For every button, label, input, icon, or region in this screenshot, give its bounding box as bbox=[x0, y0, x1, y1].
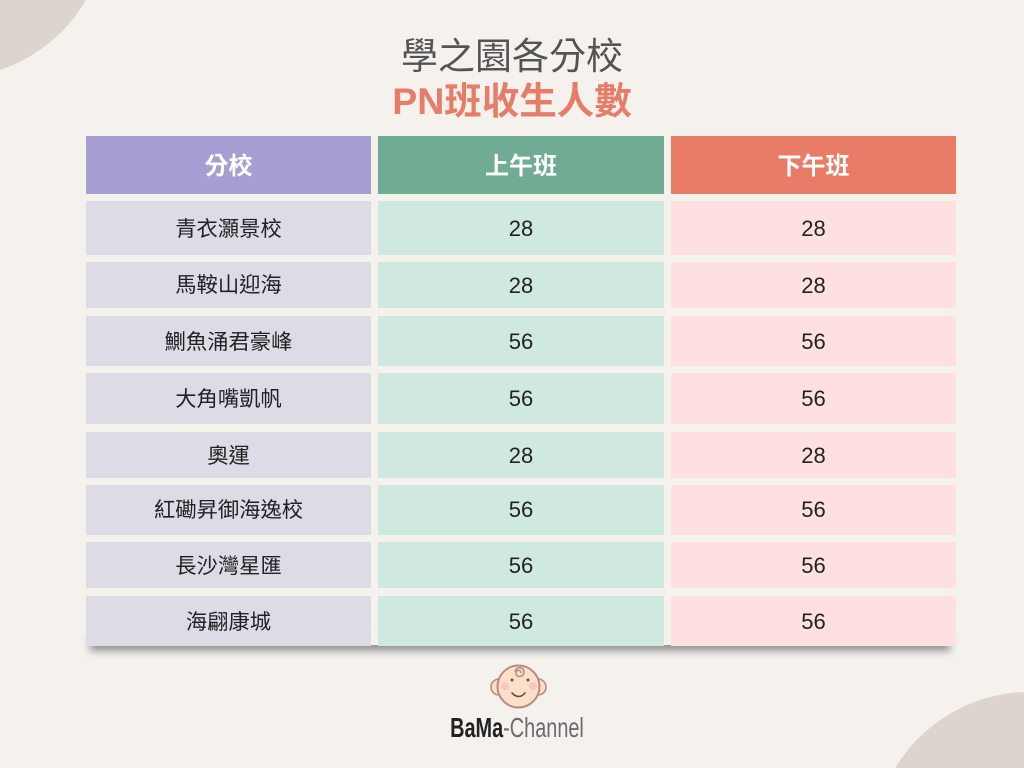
header: branch bbox=[86, 136, 371, 194]
row 3 morning bbox=[378, 316, 664, 366]
header: morning class: 上午班 bbox=[485, 153, 557, 180]
row 7 morning: 56 bbox=[509, 552, 533, 578]
header: afternoon class: 下午班 bbox=[778, 153, 850, 180]
row 5 morning bbox=[378, 432, 664, 478]
row 5 afternoon bbox=[671, 432, 956, 478]
row 3 morning: 56 bbox=[509, 328, 533, 354]
row 2 morning bbox=[378, 262, 664, 308]
row 1 morning: 28 bbox=[509, 216, 533, 240]
row 2 branch bbox=[86, 262, 371, 308]
row 1 branch bbox=[86, 201, 371, 255]
row 4 afternoon: 56 bbox=[801, 386, 826, 411]
row 8 branch bbox=[86, 596, 371, 646]
decorative corner: bottom right bbox=[895, 692, 1024, 768]
row 3 afternoon: 56 bbox=[801, 328, 826, 354]
row 7 branch bbox=[86, 542, 371, 588]
row 6 morning: 56 bbox=[509, 497, 533, 522]
row 4 morning: 56 bbox=[509, 386, 533, 411]
row 2 afternoon bbox=[671, 262, 956, 308]
row 3 afternoon bbox=[671, 316, 956, 366]
row 6 morning bbox=[378, 485, 664, 535]
row 1 afternoon: 28 bbox=[801, 216, 826, 240]
title line 2: PN班收生人數 bbox=[392, 80, 632, 122]
row 1 afternoon bbox=[671, 201, 956, 255]
row 4 afternoon bbox=[671, 373, 956, 424]
row 3 branch bbox=[86, 316, 371, 366]
row 5 branch bbox=[86, 432, 371, 478]
row 8 morning: 56 bbox=[509, 608, 533, 634]
row 7 afternoon bbox=[671, 542, 956, 588]
row 2 branch: 馬鞍山迎海 bbox=[175, 273, 282, 297]
row 6 afternoon bbox=[671, 485, 956, 535]
row 7 branch: 長沙灣星匯 bbox=[175, 554, 282, 578]
row 8 afternoon bbox=[671, 596, 956, 646]
row 6 branch bbox=[86, 485, 371, 535]
row 5 branch: 奧運 bbox=[207, 444, 250, 468]
row 6 afternoon: 56 bbox=[801, 497, 826, 522]
row 5 morning: 28 bbox=[509, 442, 533, 468]
header: branch: 分校 bbox=[204, 153, 252, 180]
row 7 afternoon: 56 bbox=[801, 552, 826, 578]
brand wordmark: BaMa-Channel bbox=[450, 712, 584, 743]
row 2 afternoon: 28 bbox=[801, 272, 826, 298]
row 7 morning bbox=[378, 542, 664, 588]
row 4 morning bbox=[378, 373, 664, 424]
table shadow bbox=[90, 630, 950, 645]
title line 1: 學之園各分校 bbox=[401, 36, 623, 77]
row 8 morning bbox=[378, 596, 664, 646]
row 6 branch: 紅磡昇御海逸校 bbox=[154, 498, 303, 522]
row 1 morning bbox=[378, 201, 664, 255]
header: morning class bbox=[378, 136, 664, 194]
row 4 branch bbox=[86, 373, 371, 424]
row 2 morning: 28 bbox=[509, 272, 533, 298]
row 8 branch: 海翩康城 bbox=[186, 610, 271, 634]
header: afternoon class bbox=[671, 136, 956, 194]
row 8 afternoon: 56 bbox=[801, 608, 826, 634]
row 1 branch: 青衣灝景校 bbox=[175, 216, 282, 240]
row 3 branch: 鰂魚涌君豪峰 bbox=[165, 330, 292, 354]
decorative corner: top left bbox=[0, 0, 86, 70]
row 5 afternoon: 28 bbox=[801, 442, 826, 468]
icon: baby face logo bbox=[490, 664, 547, 708]
row 4 branch: 大角嘴凱帆 bbox=[175, 387, 282, 411]
